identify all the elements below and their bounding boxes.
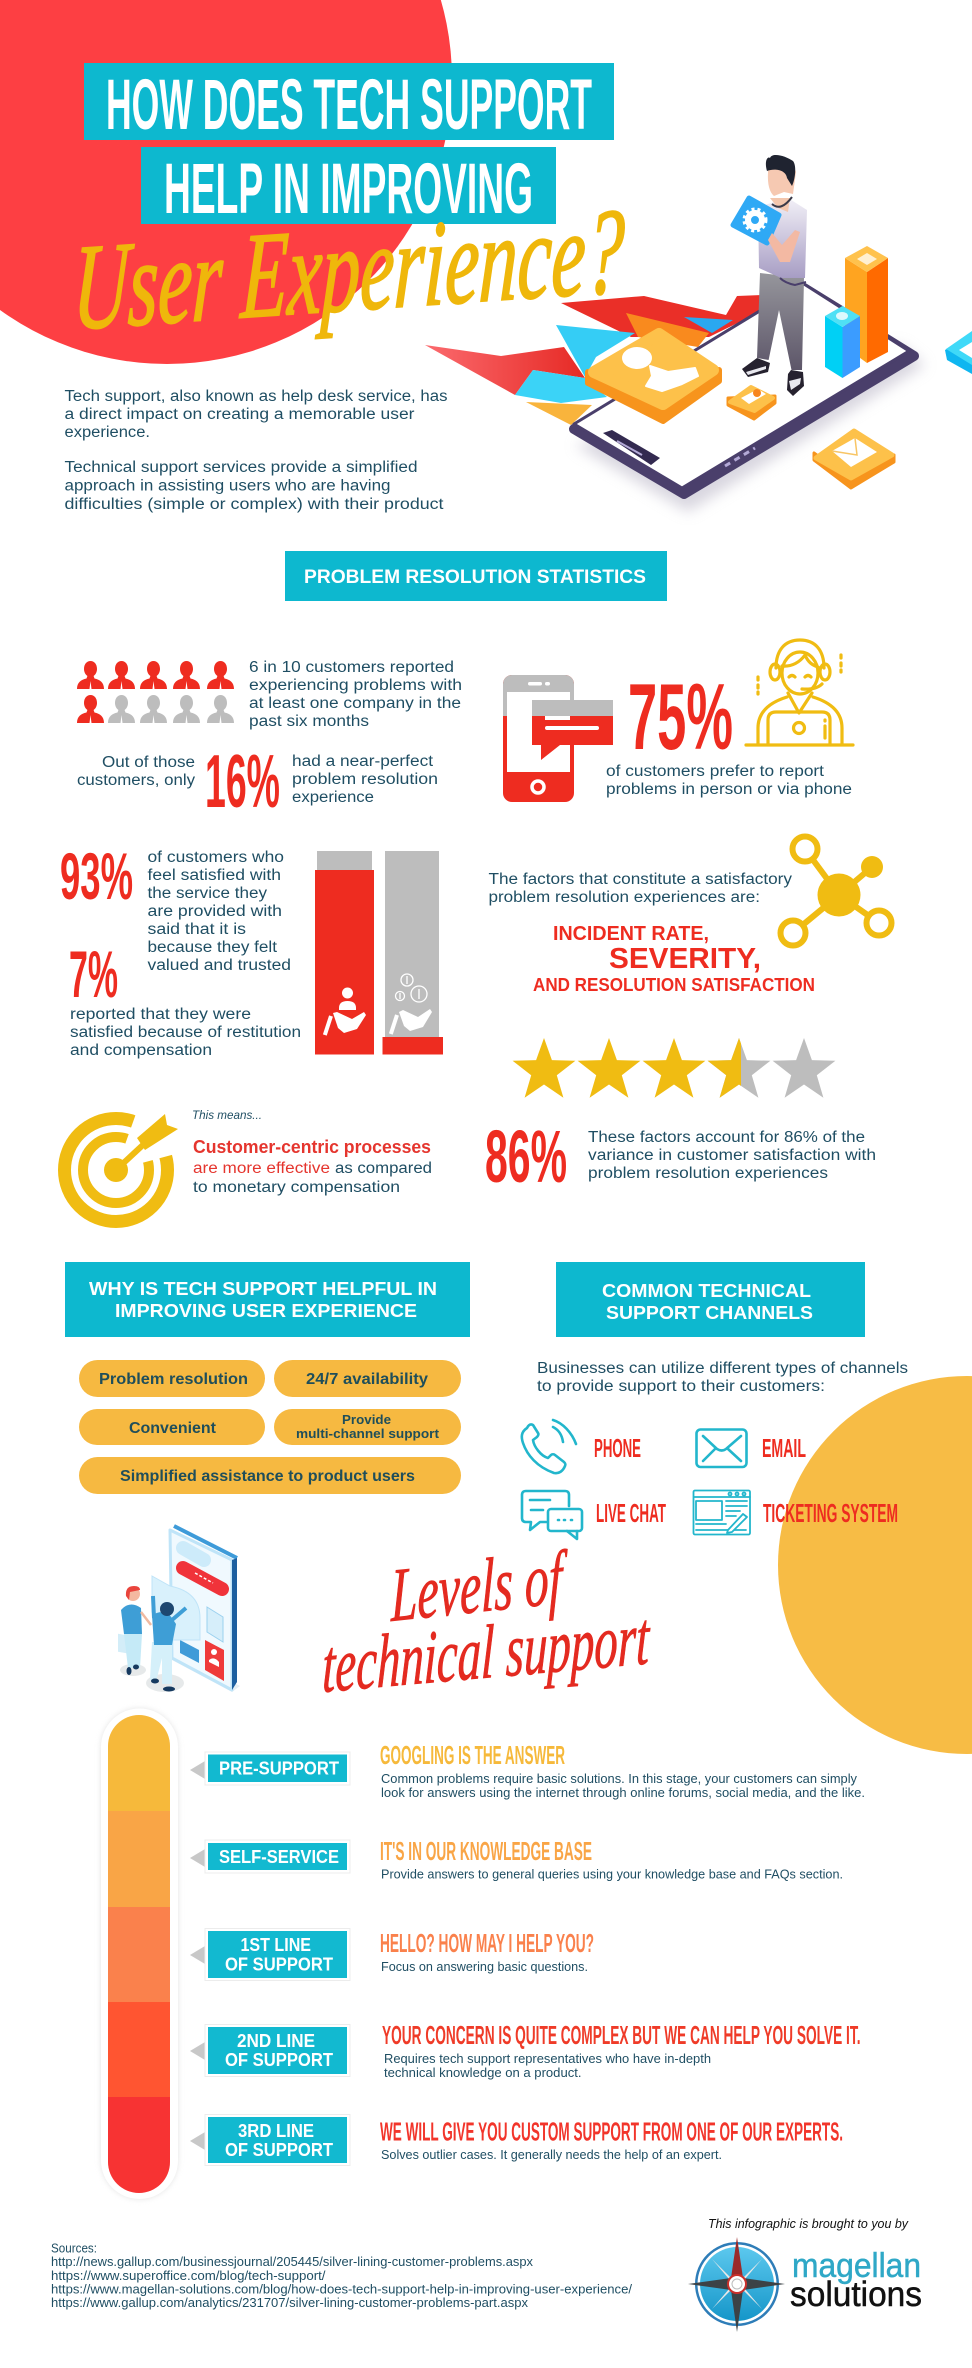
stat: 75%: 75% — [628, 664, 733, 769]
pill: simplified assistance: Simplified assistance to product users — [120, 1468, 415, 1485]
panel: 86 percent: problem resolution experiences — [588, 1165, 828, 1182]
text: 7% description: and compensation — [70, 1042, 212, 1059]
text: 7% description — [70, 1006, 301, 1059]
heading: GOOGLING IS THE ANSWER — [380, 1740, 565, 1770]
title line 1 — [84, 63, 614, 145]
title script: User Experience: User Experience? — [71, 183, 627, 356]
text: 93% description: feel satisfied with — [148, 867, 281, 884]
label: email: EMAIL — [762, 1433, 806, 1463]
pill: multi-channel support: Provide — [342, 1412, 391, 1427]
description: Common problems require basic solutions. In this stage, your customers can simply — [381, 1772, 858, 1786]
text: 93% description: valued and trusted — [148, 957, 291, 974]
icon: coins in hand — [389, 974, 432, 1035]
description: Requires tech support representatives who have in-depth — [384, 2052, 711, 2066]
text: 7% description: satisfied because of restitution — [70, 1024, 301, 1041]
label badge: OF SUPPORT — [225, 1954, 333, 1974]
description — [381, 1772, 865, 1800]
arrow — [190, 1849, 205, 1867]
text: The factors that constitute a satisfactory — [488, 871, 792, 888]
text: 93% description — [148, 849, 291, 974]
level: self-service — [190, 1836, 843, 1882]
icon: network nodes — [780, 836, 892, 946]
label badge: OF SUPPORT — [225, 2140, 333, 2160]
brand name: solutions: solutions — [790, 2275, 922, 2314]
pill: 24/7 availability: 24/7 availability — [306, 1371, 428, 1388]
brand credit — [688, 2216, 922, 2332]
intro text — [64, 388, 448, 513]
star rating — [513, 1038, 835, 1098]
colour streaks — [425, 295, 762, 425]
panel: 86 percent: variance in customer satisfaction with — [588, 1147, 876, 1164]
text: experiencing problems with — [249, 677, 462, 694]
factor list: INCIDENT RATE, — [553, 923, 709, 945]
people icons — [77, 661, 234, 723]
intro text: experience. — [64, 424, 150, 441]
label badge: PRE-SUPPORT — [219, 1758, 339, 1778]
sources: Sources: — [51, 2242, 97, 2256]
phone shadow — [575, 345, 925, 512]
text: past six months — [249, 713, 369, 730]
arrow — [190, 1761, 205, 1779]
heading: problem resolution statistics: PROBLEM RESOLUTION STATISTICS — [304, 567, 646, 588]
phone device — [170, 1526, 237, 1690]
icon: support agent — [746, 640, 853, 745]
sources: http://news.gallup.com/businessjournal/205445/silver-lining-customer-problems.aspx — [51, 2255, 534, 2269]
text: 7% description: reported that they were — [70, 1006, 251, 1023]
pill: simplified assistance — [79, 1457, 461, 1494]
panel: 16 percent — [77, 739, 438, 823]
pill: 24/7 availability — [274, 1360, 461, 1397]
panel: 93 percent vs 7 percent — [60, 839, 443, 1059]
heading: common technical support channels: SUPPORT CHANNELS — [606, 1302, 813, 1323]
text: of customers prefer to report — [606, 763, 825, 780]
pill: multi-channel support: multi-channel support — [296, 1426, 440, 1441]
heading: common technical support channels — [556, 1262, 865, 1337]
icon: target with arrow — [64, 1108, 190, 1222]
description: technical knowledge on a product. — [384, 2066, 582, 2080]
pill: problem resolution: Problem resolution — [99, 1371, 248, 1388]
tile: toggle — [728, 387, 775, 419]
panel: 16 percent: customers, only — [77, 772, 195, 789]
stat: 93%: 93% — [60, 839, 133, 913]
heading: levels of technical support: technical support — [322, 1596, 651, 1709]
pill: convenient: Convenient — [129, 1420, 216, 1437]
panel: 86 percent: These factors account for 86% of the — [588, 1129, 865, 1146]
label: live chat: LIVE CHAT — [596, 1498, 666, 1528]
level: 3rd line of support — [190, 2114, 843, 2166]
tile: user profile — [588, 334, 719, 421]
heading: why is tech support helpful: WHY IS TECH SUPPORT HELPFUL IN — [89, 1278, 437, 1299]
label badge: 3RD LINE — [238, 2121, 314, 2141]
heading: levels of technical support: Levels of — [390, 1535, 568, 1638]
panel: customer-centric conclusion — [64, 1108, 432, 1222]
text: 93% description: of customers who — [148, 849, 284, 866]
heading: levels of technical support — [322, 1535, 651, 1709]
heading: IT'S IN OUR KNOWLEDGE BASE — [380, 1836, 592, 1866]
man standing — [733, 155, 807, 396]
label badge: 1ST LINE — [240, 1935, 311, 1955]
phone body — [574, 284, 914, 494]
scroll panel — [152, 1576, 200, 1640]
title line 2: HELP IN IMPROVING — [164, 150, 533, 229]
icon: person in hand — [323, 988, 366, 1036]
label badge — [205, 1840, 350, 1873]
text: This means... — [192, 1108, 262, 1122]
description: Provide answers to general queries using your knowledge base and FAQs section. — [381, 1868, 843, 1882]
factor list: AND RESOLUTION SATISFACTION — [533, 975, 815, 995]
arrow — [190, 1946, 205, 1964]
text: to monetary compensation — [193, 1179, 400, 1196]
pill: problem resolution — [79, 1360, 265, 1397]
panel: 6 in 10 customers — [77, 659, 462, 730]
panel: 16 percent: Out of those — [102, 754, 195, 771]
tile: partially cropped cyan — [945, 331, 972, 374]
level: pre-support — [190, 1740, 865, 1800]
icon: ticketing system — [694, 1490, 750, 1534]
level: 2nd line of support — [190, 2020, 860, 2080]
label badge — [205, 2114, 350, 2166]
tile: mail — [814, 431, 894, 488]
label badge — [205, 1752, 350, 1785]
intro text: a direct impact on creating a memorable user — [64, 406, 414, 423]
heading: why is tech support helpful — [65, 1262, 470, 1337]
description: Focus on answering basic questions. — [381, 1960, 588, 1974]
text: are more effective — [193, 1160, 330, 1177]
panel: 75 percent — [503, 640, 853, 802]
stat: 7%: 7% — [69, 937, 118, 1011]
man — [150, 1596, 186, 1692]
label: phone: PHONE — [594, 1433, 641, 1463]
text: Customer-centric processes — [193, 1137, 431, 1157]
level: 1st line of support — [190, 1928, 594, 1980]
panel: satisfaction factors — [488, 836, 892, 995]
label badge: OF SUPPORT — [225, 2050, 333, 2070]
benefits pills — [79, 1360, 461, 1494]
intro text: Technical support services provide a simplified — [64, 459, 418, 476]
description: look for answers using the internet through online forums, social media, and the like. — [381, 1786, 865, 1800]
heading: problem resolution statistics — [285, 551, 667, 601]
channels intro text: to provide support to their customers: — [537, 1378, 825, 1395]
text: 93% description: the service they — [148, 885, 267, 902]
arrow — [190, 2042, 205, 2060]
label badge: SELF-SERVICE — [219, 1847, 339, 1867]
heading: HELLO? HOW MAY I HELP YOU? — [380, 1928, 594, 1958]
heading: why is tech support helpful: IMPROVING USER EXPERIENCE — [115, 1300, 417, 1321]
credit line: This infographic is brought to you by — [708, 2216, 909, 2231]
factor list — [533, 923, 815, 995]
panel: 16 percent: problem resolution — [292, 771, 438, 788]
woman — [118, 1586, 151, 1675]
title — [71, 63, 627, 356]
illustration: person on smartphone with app tiles — [425, 155, 972, 512]
brand name: magellan: magellan — [792, 2247, 921, 2285]
bar chart: trust vs compensation — [315, 851, 443, 1054]
panel: 16 percent: experience — [292, 789, 374, 806]
text: 93% description: because they felt — [148, 939, 278, 956]
icon: compass logo — [688, 2237, 785, 2332]
text: problem resolution experiences are: — [488, 889, 760, 906]
text — [192, 1108, 432, 1196]
icon: live chat — [522, 1491, 582, 1539]
red background circle — [0, 0, 452, 364]
text: 6 in 10 customers reported — [249, 659, 454, 676]
intro text: Tech support, also known as help desk service, has — [64, 388, 448, 405]
label badge — [205, 2024, 350, 2076]
pill: multi-channel support — [274, 1409, 461, 1445]
intro text: difficulties (simple or complex) with their product — [64, 496, 444, 513]
description: Solves outlier cases. It generally needs the help of an expert. — [381, 2148, 722, 2162]
title line 2 — [141, 147, 556, 229]
sources: https://www.superoffice.com/blog/tech-support/ — [51, 2269, 326, 2283]
panel: 16 percent: had a near-perfect — [292, 753, 434, 770]
icon: phone with message bubble — [503, 675, 613, 802]
sources — [51, 2242, 633, 2310]
text: 93% description: are provided with — [148, 903, 282, 920]
text — [488, 871, 792, 906]
text: problems in person or via phone — [606, 781, 852, 798]
pill: convenient — [79, 1409, 265, 1445]
support channels — [522, 1420, 898, 1539]
text — [606, 763, 852, 798]
illustration: people at phone screen — [118, 1526, 240, 1692]
text — [249, 659, 462, 730]
tile: orange bar chart column — [845, 246, 888, 363]
text: at least one company in the — [249, 695, 461, 712]
sources: https://www.gallup.com/analytics/231707/silver-lining-customer-problems-part.aspx — [51, 2296, 529, 2310]
channels intro text: Businesses can utilize different types of channels — [537, 1360, 908, 1377]
description — [384, 2052, 711, 2080]
icon: phone — [522, 1420, 576, 1473]
factor list: SEVERITY, — [609, 943, 761, 975]
panel: 16 percent: 16% — [205, 739, 280, 823]
label badge — [205, 1928, 350, 1980]
heading: common technical support channels: COMMON TECHNICAL — [602, 1280, 811, 1301]
channels intro text — [537, 1360, 908, 1395]
stat: 86%: 86% — [485, 1115, 567, 1198]
intro text: approach in assisting users who are having — [64, 478, 390, 494]
icon: email — [696, 1430, 746, 1467]
text: as compared — [335, 1160, 432, 1177]
panel: 86 percent — [485, 1115, 876, 1198]
thermometer: support levels — [101, 1708, 178, 2199]
yellow background circle — [778, 1376, 972, 1754]
sources: https://www.magellan-solutions.com/blog/how-does-tech-support-help-in-improving-user-experience/ — [51, 2282, 633, 2296]
text: 93% description: said that it is — [148, 921, 246, 938]
label badge: 2ND LINE — [237, 2031, 315, 2051]
tile: blue bar chart column — [825, 306, 860, 378]
arrow — [190, 2132, 205, 2150]
